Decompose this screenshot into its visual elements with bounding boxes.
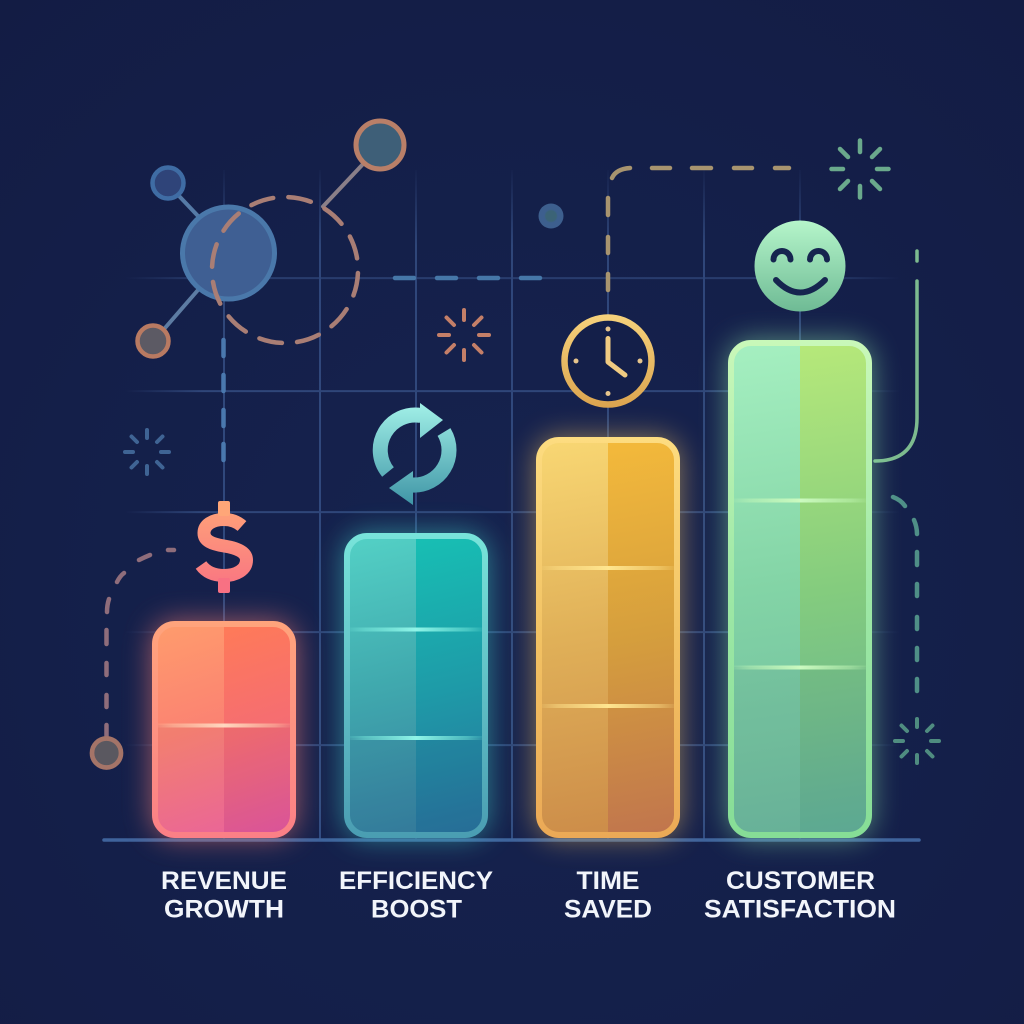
node: small blue circle — [152, 168, 184, 198]
sparkle: blue — [125, 430, 169, 474]
left dashed connector — [92, 550, 174, 768]
node: small orange circle — [138, 326, 168, 356]
label: efficiency boost: EFFICIENCY — [339, 867, 493, 895]
dashed line down from network — [221, 340, 226, 460]
label: customer satisfaction: SATISFACTION — [704, 896, 896, 924]
icon: dollar sign — [201, 501, 246, 593]
bar: efficiency boost — [344, 533, 488, 838]
sparkle: lower green — [895, 719, 939, 763]
sparkle: top right green — [832, 140, 888, 198]
green dashed connector — [893, 497, 917, 691]
horizontal dashed line — [395, 276, 540, 280]
connector lines — [165, 163, 364, 328]
bar: revenue growth — [152, 621, 296, 838]
icon: clock — [564, 318, 652, 404]
label: time saved: SAVED — [564, 896, 652, 924]
left node — [92, 738, 121, 768]
baseline axis — [104, 838, 919, 842]
node: large orange circle — [356, 121, 404, 169]
label: time saved: TIME — [576, 867, 640, 895]
label: customer satisfaction: CUSTOMER — [726, 867, 875, 895]
icon: refresh arrows — [380, 403, 449, 505]
yellow dashed connector — [608, 168, 789, 290]
sparkle: orange — [439, 310, 489, 360]
label: revenue growth: GROWTH — [164, 896, 284, 924]
bar: customer satisfaction — [728, 340, 872, 838]
bar: time saved — [536, 437, 680, 838]
network diagram — [138, 121, 540, 460]
floating dot — [538, 204, 564, 228]
background grid — [125, 170, 900, 840]
label: revenue growth: REVENUE — [161, 867, 287, 895]
label: efficiency boost: BOOST — [371, 896, 462, 924]
node: large blue circle — [182, 207, 274, 299]
dashed orbit circle — [212, 197, 358, 343]
icon: smiley face — [754, 220, 846, 312]
green solid connector — [875, 251, 917, 461]
